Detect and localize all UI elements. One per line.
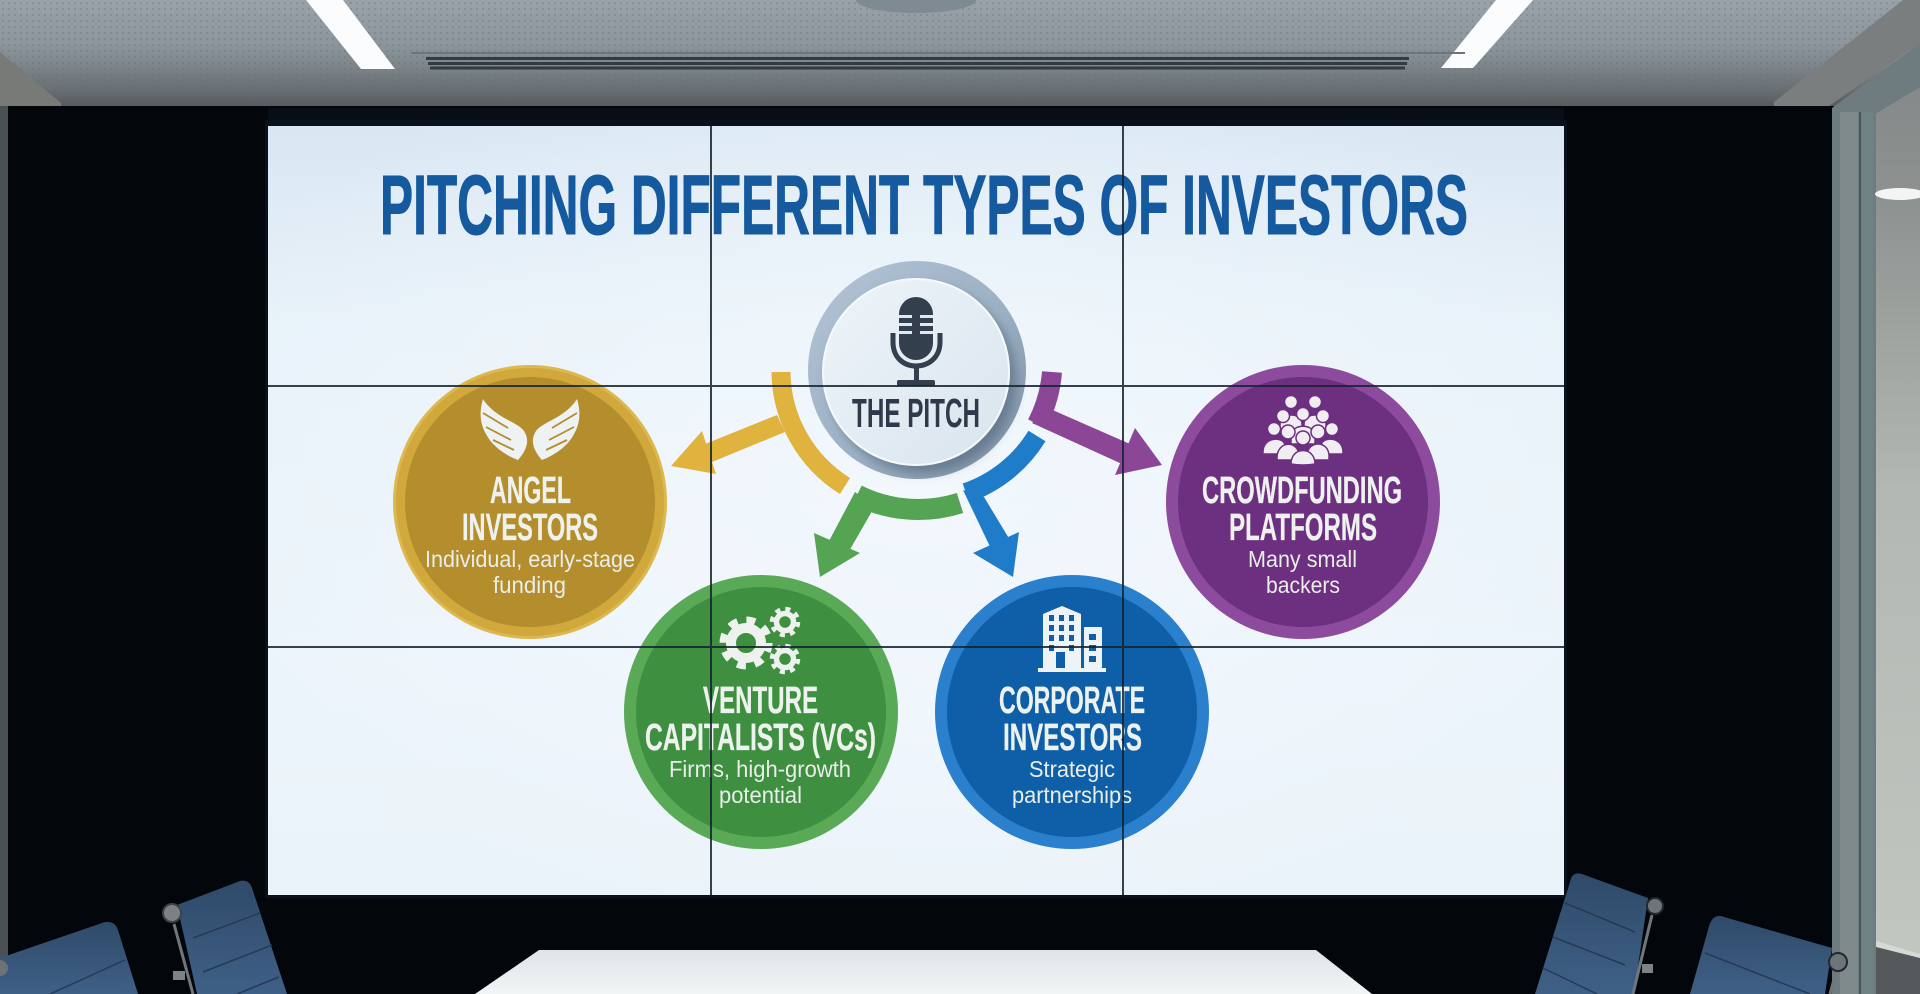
panel: venture capitalists: CAPITALISTS (VCs): [645, 717, 876, 759]
room lamp: [1875, 188, 1920, 200]
panel: angel investors: INVESTORS: [462, 507, 598, 549]
panel: corporate investors: [935, 575, 1209, 849]
ceiling: [0, 0, 1920, 108]
icon: office buildings: [1038, 606, 1106, 672]
video wall screen: [268, 126, 1564, 895]
panel: venture capitalists: potential: [719, 782, 802, 808]
ceiling light right: [1441, 0, 1533, 68]
arrow: to venture capitalists: [814, 492, 960, 577]
central hub: the pitch: [808, 261, 1026, 479]
arrow: to crowdfunding platforms: [1032, 372, 1162, 475]
icon: angel wings: [481, 399, 579, 460]
icon: gears: [723, 609, 798, 672]
glass door and room on the right: [1832, 43, 1920, 994]
chair: right: [1535, 873, 1663, 994]
arrow: to corporate investors: [963, 436, 1037, 577]
panel: angel investors: funding: [493, 572, 566, 598]
panel: corporate investors: INVESTORS: [1003, 717, 1142, 759]
description: Individual, early-stage: [425, 546, 635, 572]
description: Strategic: [1029, 756, 1115, 782]
name: VENTURE: [703, 680, 818, 722]
description: Many small: [1248, 546, 1357, 572]
panel: venture capitalists: [624, 575, 898, 849]
ceiling air vent: [411, 52, 1465, 70]
ceiling round fixture: [856, 0, 976, 13]
name: CORPORATE: [999, 680, 1145, 722]
panel: crowdfunding platforms: PLATFORMS: [1229, 507, 1377, 549]
panel: corporate investors: partnerships: [1012, 782, 1132, 808]
description: Firms, high-growth: [669, 756, 851, 782]
conference table: [475, 950, 1372, 994]
chair: far right: [1690, 916, 1847, 994]
icon: crowd of people: [1263, 396, 1343, 465]
chair: left: [163, 881, 287, 994]
panel: crowdfunding platforms: [1166, 365, 1440, 639]
panel: crowdfunding platforms: backers: [1266, 572, 1340, 598]
icon: microphone: [893, 297, 940, 386]
screen bezel grid: [268, 126, 1564, 895]
name: CROWDFUNDING: [1202, 470, 1402, 512]
name: ANGEL: [490, 470, 571, 512]
chair: far left: [0, 922, 138, 994]
arrow: to angel investors: [671, 372, 845, 486]
panel: angel investors: [393, 365, 667, 639]
hub label: THE PITCH: [852, 390, 980, 436]
ceiling light left: [306, 0, 395, 69]
